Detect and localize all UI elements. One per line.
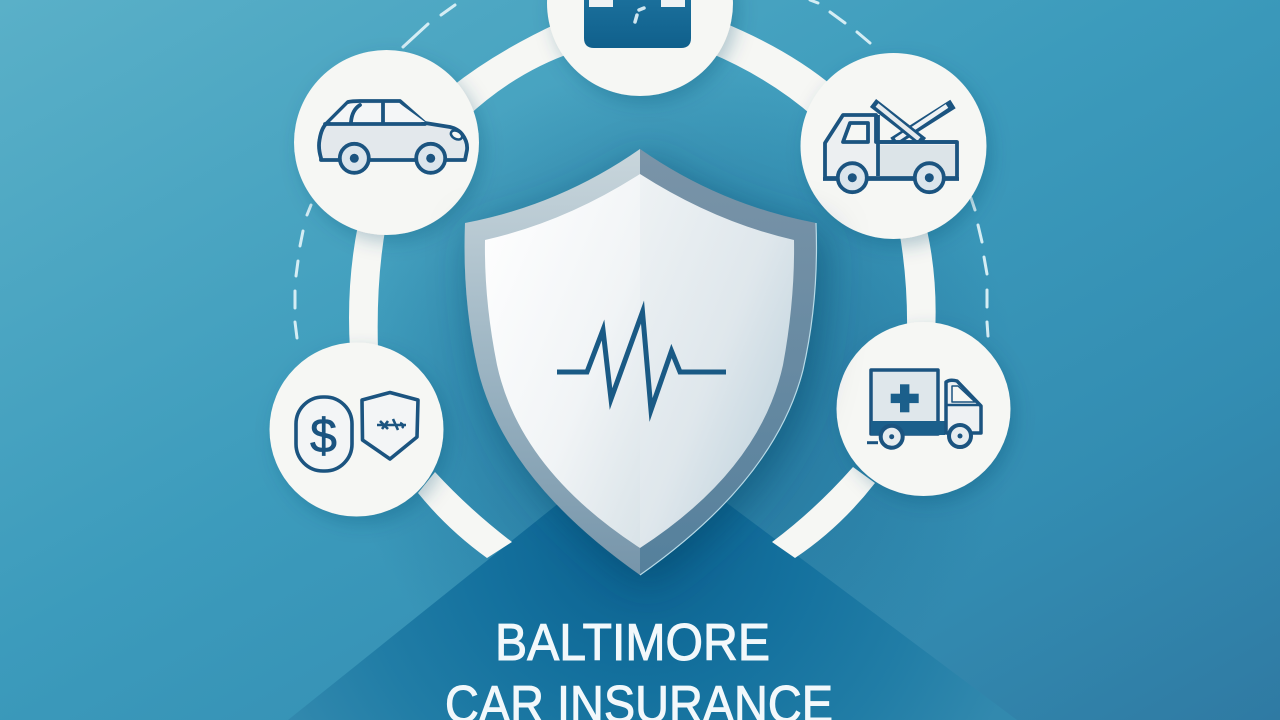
dollar and shield circle <box>270 342 444 516</box>
shield outer frame <box>465 149 816 575</box>
top circle: partially cropped document icon <box>547 0 733 96</box>
central shield <box>465 149 816 575</box>
icon: small shield <box>362 392 418 459</box>
dark triangular title backdrop <box>288 438 1017 720</box>
car circle <box>294 50 479 235</box>
ambulance circle <box>836 322 1010 496</box>
icon: tow truck <box>823 103 959 192</box>
tow truck circle <box>800 53 986 239</box>
icon: heartbeat pulse <box>557 312 726 410</box>
title: BALTIMORE <box>495 614 770 672</box>
dashed orbit lines <box>295 0 988 338</box>
shield edge highlight <box>640 223 816 575</box>
ring connectors <box>349 22 936 558</box>
icon: dollar pill: $ <box>310 410 337 463</box>
icon: dollar pill <box>296 397 352 471</box>
icon: dark document <box>584 0 691 48</box>
icon: car <box>319 101 467 173</box>
icon: ambulance <box>867 370 981 448</box>
soft shade behind the shield <box>300 60 1060 720</box>
title <box>445 614 833 720</box>
shield inner face <box>485 174 794 548</box>
